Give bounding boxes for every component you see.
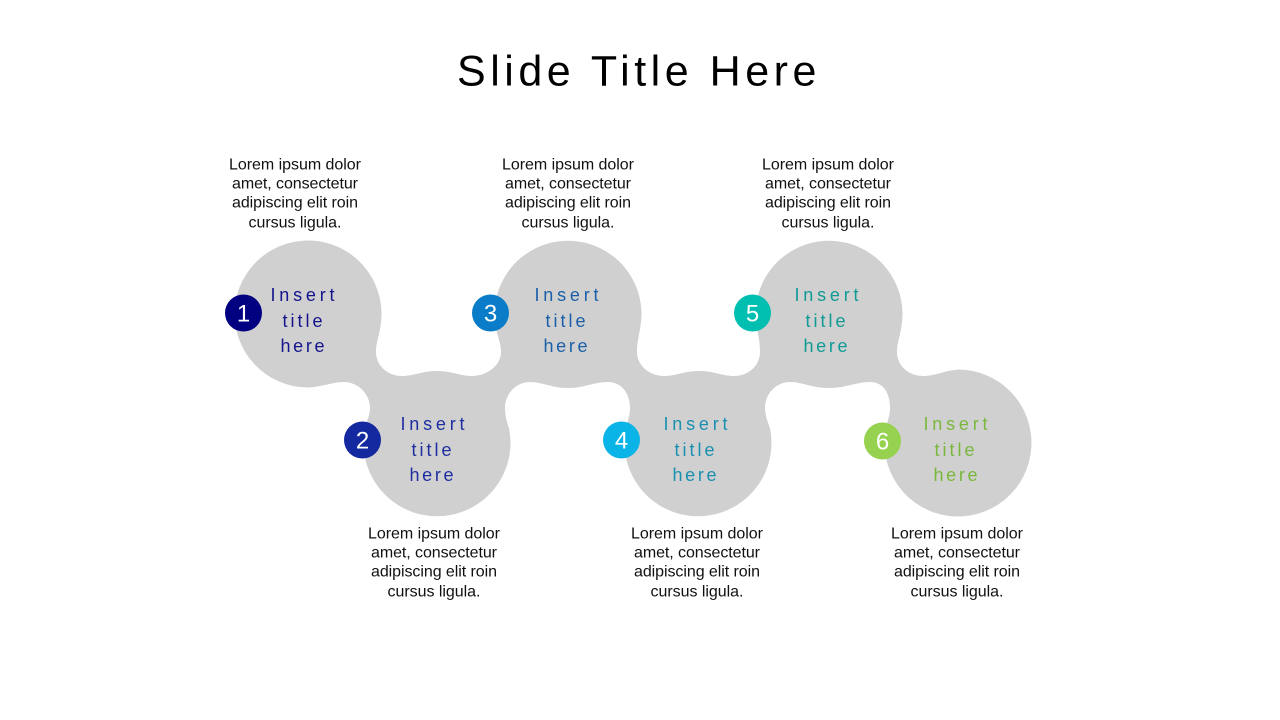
step 1 (225, 156, 362, 356)
step 3 description: Lorem ipsum dolor (502, 156, 635, 174)
step 2 number badge (344, 422, 381, 458)
step 5 title: here (804, 336, 850, 356)
step 3 number badge (472, 294, 509, 332)
step 6 description: cursus ligula. (910, 584, 1004, 600)
step 2 description: cursus ligula. (388, 584, 480, 600)
step 1 description: cursus ligula. (248, 214, 342, 232)
step 4 description: cursus ligula. (650, 584, 744, 600)
step 3 title (534, 285, 602, 356)
step 3 description (502, 156, 635, 232)
step 2 description: amet, consectetur (371, 544, 498, 562)
step 5 title: Insert (794, 285, 862, 305)
step 1 number badge (225, 294, 262, 332)
step 6 title: here (934, 465, 980, 485)
step 1 title: here (280, 336, 328, 356)
step 1 title: Insert (270, 285, 338, 305)
step 6 number badge (864, 422, 901, 460)
step 2 title: Insert (400, 414, 468, 434)
step 3 title: here (544, 336, 590, 356)
step 2 (344, 414, 501, 600)
step 4 title: here (672, 465, 720, 485)
step 4 description (631, 526, 764, 600)
step 6 title: title (934, 440, 978, 460)
step 5 description: adipiscing elit roin (765, 194, 891, 212)
step 2 title: title (412, 440, 454, 460)
step 2 description (368, 526, 501, 600)
step 3 description: cursus ligula. (522, 214, 614, 232)
step 6 description (891, 526, 1024, 600)
step 3 (472, 156, 635, 356)
step 5 title: title (806, 311, 848, 331)
step 4 title: Insert (664, 414, 730, 434)
step 4 description: Lorem ipsum dolor (631, 526, 764, 542)
step 5 number badge (734, 294, 771, 332)
step 1 title: title (282, 311, 326, 331)
step 6 (864, 414, 1024, 600)
step 5 (734, 156, 895, 356)
step 1 description: adipiscing elit roin (232, 194, 358, 212)
step 2 title: here (410, 465, 456, 485)
step 1 number badge: 1 (237, 300, 250, 328)
step 1 title (270, 285, 338, 356)
step 6 title: Insert (924, 414, 990, 434)
step 2 number badge: 2 (356, 428, 369, 454)
step 6 title (924, 414, 990, 485)
step 1 description: Lorem ipsum dolor (229, 156, 362, 174)
step 1 description: amet, consectetur (232, 176, 359, 192)
step 5 description: amet, consectetur (765, 176, 892, 192)
serpentine shape of six joined circles (235, 240, 1031, 516)
step 5 title (794, 285, 862, 356)
step 4 description: amet, consectetur (634, 544, 761, 562)
step 3 title: Insert (534, 285, 602, 305)
step 3 number badge: 3 (484, 300, 497, 328)
step 5 description: Lorem ipsum dolor (762, 156, 895, 174)
step 6 description: amet, consectetur (894, 544, 1021, 562)
step 5 description (762, 156, 895, 232)
step 3 description: amet, consectetur (505, 176, 632, 192)
step 5 number badge: 5 (746, 300, 759, 328)
step 2 description: adipiscing elit roin (371, 564, 497, 580)
step 4 title (664, 414, 730, 485)
step 5 description: cursus ligula. (782, 214, 874, 232)
step 2 title (400, 414, 468, 485)
step 4 (603, 414, 764, 600)
step 4 number badge: 4 (615, 428, 628, 454)
step 2 description: Lorem ipsum dolor (368, 526, 501, 542)
step 6 description: adipiscing elit roin (894, 564, 1020, 580)
step 4 title: title (674, 440, 718, 460)
step 6 number badge: 6 (876, 428, 889, 456)
step 6 description: Lorem ipsum dolor (891, 526, 1024, 542)
step 3 title: title (546, 311, 588, 331)
step 4 number badge (603, 422, 640, 458)
title: Slide Title Here (457, 48, 820, 96)
step 4 description: adipiscing elit roin (634, 564, 760, 580)
step 3 description: adipiscing elit roin (505, 194, 631, 212)
step 1 description (229, 156, 362, 232)
